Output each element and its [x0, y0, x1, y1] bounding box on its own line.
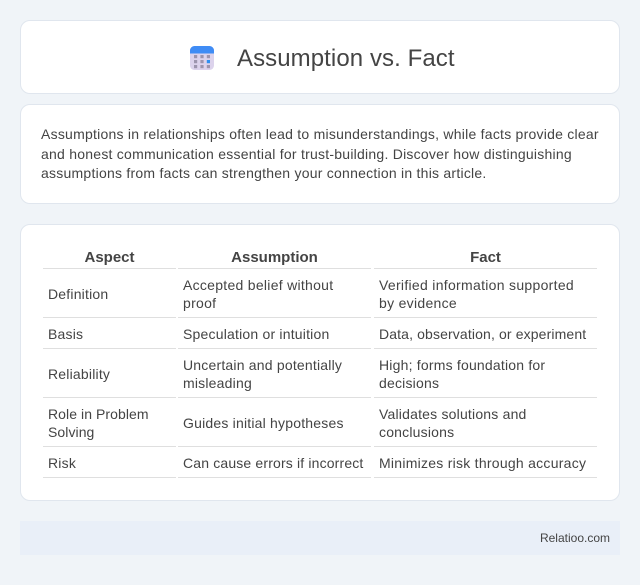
row: Role in Problem Solving: conclusions: [379, 424, 454, 440]
row: Risk: Can cause errors if incorrect: [183, 455, 363, 471]
panel: comparison table: [20, 224, 620, 501]
row: Definition: by evidence: [379, 295, 457, 311]
row: Reliability: decisions: [379, 375, 439, 391]
row: Definition: Verified information supported: [379, 277, 574, 293]
intro text: [41, 126, 599, 181]
title: Assumption vs. Fact: [237, 45, 455, 72]
row: Risk: [48, 455, 586, 471]
row: Reliability: Uncertain and potentially: [183, 357, 342, 373]
intro text: Assumptions in relationships often lead to misunderstandings, while facts provide clear: [41, 126, 599, 142]
intro text: assumptions from facts can strengthen your connection in this article.: [41, 165, 487, 181]
row: Definition: proof: [183, 295, 216, 311]
footer bar: [20, 521, 620, 555]
panel: title header: [20, 20, 620, 94]
row: Reliability: High; forms foundation for: [379, 357, 545, 373]
row: Role in Problem Solving: Validates solutions and: [379, 406, 527, 422]
table heading: Fact: Fact: [470, 249, 501, 266]
row: Role in Problem Solving: Guides initial hypotheses: [183, 415, 344, 431]
row: Basis: Data, observation, or experiment: [379, 326, 586, 342]
icon: calendar: [190, 46, 214, 70]
footer credit: Relatioo.com: [540, 531, 610, 545]
row: Role in Problem Solving: [48, 406, 527, 440]
row: Basis: Speculation or intuition: [183, 326, 329, 342]
row: Definition: Accepted belief without: [183, 277, 333, 293]
panel: introduction: [20, 104, 620, 204]
row: Basis: Basis: [48, 326, 83, 342]
row: Definition: [48, 277, 574, 311]
row: Role in Problem Solving: Solving: [48, 424, 94, 440]
table heading: Aspect: Aspect: [84, 249, 135, 266]
row: Basis: [48, 326, 586, 342]
table heading: Assumption: Assumption: [231, 249, 318, 266]
row: Reliability: [48, 357, 545, 391]
row: Reliability: misleading: [183, 375, 252, 391]
intro text: and honest communication essential for trust-building. Discover how distinguishing: [41, 146, 572, 162]
row: Role in Problem Solving: Role in Problem: [48, 406, 149, 422]
row: Risk: Minimizes risk through accuracy: [379, 455, 586, 471]
row: Risk: Risk: [48, 455, 76, 471]
row: Definition: Definition: [48, 286, 108, 302]
row: Reliability: Reliability: [48, 366, 110, 382]
